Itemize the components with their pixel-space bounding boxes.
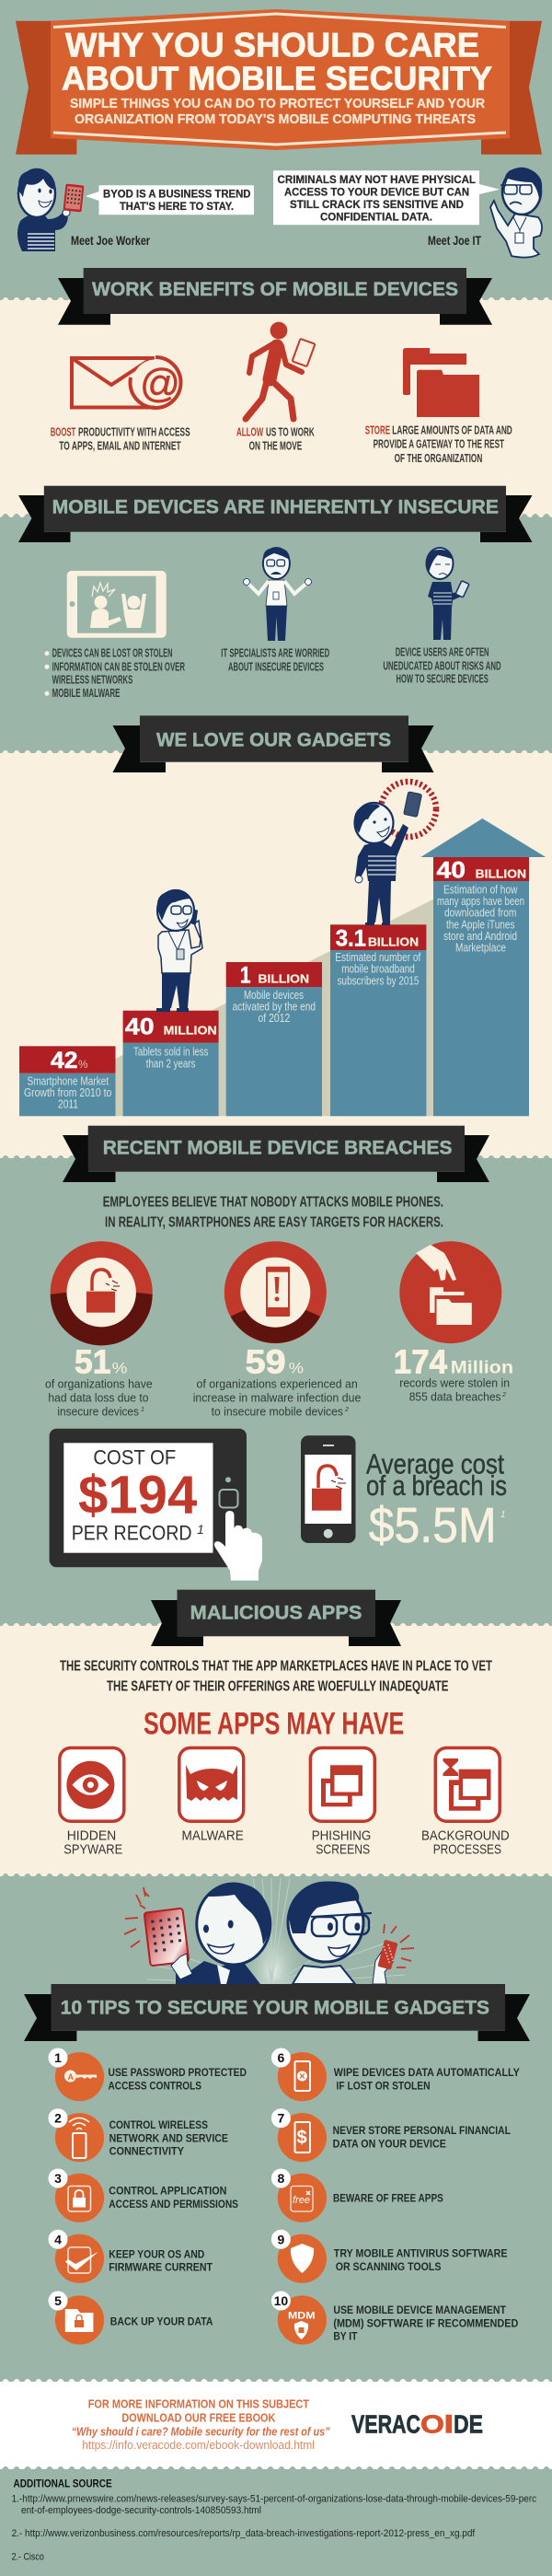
bar: 1 billion: activated by the end: [233, 1001, 316, 1014]
callout: average breach cost phone: Average cost: [366, 1448, 504, 1480]
icon: hand stealing folders: [399, 1241, 501, 1343]
footer call to action: https://info.veracode.com/ebook-download.html: [82, 2439, 315, 2452]
illustration: two characters with devices: [124, 1878, 414, 2025]
bar: 40 billion arrow: BILLION: [476, 867, 526, 880]
tip 10: (MDM) SOFTWARE IF RECOMMENDED: [333, 2316, 519, 2329]
bar: 40 billion arrow: [420, 818, 546, 1116]
tip 5: 5: [54, 2293, 62, 2308]
bar: 40 billion arrow: store and Android: [443, 930, 517, 943]
bar: 3.1 billion: Estimated number of: [335, 951, 421, 964]
ribbon title: MOBILE DEVICES ARE INHERENTLY INSECURE: [52, 496, 499, 517]
label: Meet Joe Worker: Meet Joe Worker: [71, 234, 151, 248]
sources: 2.- http://www.verizonbusiness.com/resources/reports/rp_data-breach-investigations-report-2012-press_en_xg.pdf: [12, 2528, 476, 2539]
tip 1: USE PASSWORD PROTECTED: [109, 2066, 247, 2079]
bar: 40 billion arrow: Estimation of how: [443, 884, 518, 897]
title: WHY YOU SHOULD CARE: [65, 27, 479, 64]
speech bubble: Joe IT: ACCESS TO YOUR DEVICE BUT CAN: [284, 185, 469, 198]
bar: 3.1 billion: BILLION: [368, 935, 419, 948]
callout: average breach cost phone: 1: [500, 1510, 506, 1520]
title banner: [16, 9, 542, 155]
tip 3: CONTROL APPLICATION: [109, 2185, 226, 2198]
chart: growing gadgets bar chart: [19, 818, 546, 1116]
callout: average breach cost phone: of a breach is: [366, 1469, 507, 1502]
stat: 174 million: records were stolen in: [399, 1376, 510, 1390]
bar: 40 million: Tablets sold in less: [133, 1046, 208, 1059]
ribbon: malicious apps: [151, 1590, 401, 1646]
icon: folders: [403, 348, 479, 417]
bar: 1 billion: BILLION: [258, 972, 309, 985]
ribbon: 10 tips: [24, 1984, 530, 2041]
bar: 3.1 billion: 3.1: [336, 925, 366, 951]
callout: average breach cost phone: [301, 1435, 507, 1553]
label: SPYWARE: [63, 1842, 122, 1858]
title: ABOUT MOBILE SECURITY: [62, 59, 492, 97]
character: worker raising phone: [354, 782, 436, 925]
tip 10: BY IT: [333, 2330, 358, 2343]
stat: 59 percent: 59: [246, 1343, 286, 1381]
speech bubble: Joe IT: STILL CRACK ITS SENSITIVE AND: [290, 198, 464, 211]
tip 8: free: [293, 2195, 310, 2206]
stat: 59 percent: increase in malware infection due: [193, 1391, 361, 1405]
text: boost: PRODUCTIVITY WITH ACCESS: [78, 425, 190, 438]
callout: cost per record tablet: COST OF: [93, 1446, 176, 1469]
tip 10: [271, 2291, 519, 2345]
bar: 42%: Growth from 2010 to: [24, 1086, 111, 1099]
tip 1: A: [68, 2072, 74, 2082]
stat: 174 million: 855 data breaches: [409, 1390, 501, 1404]
tip 4: KEEP YOUR OS AND: [109, 2247, 205, 2260]
app icon: phishing screens: [310, 1747, 374, 1821]
text: allow: US TO WORK: [266, 425, 315, 438]
stat: 51 percent: had data loss due to: [48, 1391, 149, 1405]
tip 8: [271, 2169, 443, 2222]
text: insecure bullets: DEVICES CAN BE LOST OR STOLEN: [52, 647, 172, 660]
text: device users: [383, 646, 501, 686]
tip 3: ACCESS AND PERMISSIONS: [109, 2198, 238, 2210]
text: boost: [51, 425, 190, 453]
app icon: malware: [179, 1747, 244, 1821]
bar: 1 billion: Mobile devices: [244, 989, 304, 1002]
tip 6: WIPE DEVICES DATA AUTOMATICALLY: [334, 2066, 520, 2079]
ribbon title: WORK BENEFITS OF MOBILE DEVICES: [92, 279, 458, 300]
bar: 1 billion: 1: [240, 962, 251, 988]
stat: 59 percent: %: [289, 1360, 304, 1377]
tip 4: FIRMWARE CURRENT: [109, 2261, 213, 2274]
label: Meet Joe IT: Meet Joe IT: [428, 234, 482, 248]
subtitle: ORGANIZATION FROM TODAY'S MOBILE COMPUTING THREATS: [75, 112, 476, 127]
tip 3: 3: [54, 2171, 62, 2186]
stat: 174 million: [394, 1343, 513, 1404]
ribbon title: MALICIOUS APPS: [190, 1603, 362, 1624]
label: HIDDEN: [67, 1828, 116, 1843]
text: boost: BOOST: [51, 425, 76, 438]
label: [312, 1828, 371, 1858]
character: Joe IT: [490, 168, 542, 258]
tip 1: ACCESS CONTROLS: [109, 2079, 201, 2092]
ribbon title: 10 TIPS TO SECURE YOUR MOBILE GADGETS: [61, 1998, 489, 2019]
tip 8: 8: [278, 2171, 285, 2186]
speech bubble: Joe Worker: BYOD IS A BUSINESS TREND: [103, 188, 251, 201]
stat: 51 percent: 1: [141, 1407, 144, 1413]
stat: 174 million: 2: [501, 1392, 506, 1398]
label: SCREENS: [316, 1842, 370, 1858]
stat: 174 million: Million: [451, 1359, 513, 1378]
stat: 51 percent: 51: [75, 1343, 110, 1381]
bar: 42%: 42: [51, 1048, 77, 1073]
callout: cost per record tablet: PER RECORD: [72, 1521, 192, 1544]
bar: 3.1 billion: mobile broadband: [341, 963, 415, 976]
tip 10: USE MOBILE DEVICE MANAGEMENT: [333, 2303, 507, 2316]
tip 1: [48, 2048, 247, 2101]
bar: 3.1 billion: [330, 924, 426, 1116]
stat: 59 percent: 2: [344, 1407, 349, 1413]
tip 10: MDM: [288, 2310, 315, 2321]
label: BACKGROUND: [421, 1828, 510, 1843]
text: store: STORE: [365, 424, 390, 436]
bar: 40 billion arrow: Marketplace: [455, 942, 506, 955]
subtitle: [70, 97, 486, 127]
tip 7: [271, 2108, 511, 2162]
tip 7: NEVER STORE PERSONAL FINANCIAL: [333, 2124, 511, 2137]
ribbon: inherently insecure: [18, 486, 532, 542]
stat: 59 percent: [193, 1343, 361, 1419]
speech bubble: Joe IT: CRIMINALS MAY NOT HAVE PHYSICAL: [278, 173, 476, 186]
text: allow: ALLOW: [236, 425, 263, 438]
tip 2: NETWORK AND SERVICE: [109, 2131, 228, 2144]
stat: 51 percent: [45, 1343, 153, 1419]
label: [421, 1828, 510, 1858]
tip 2: CONNECTIVITY: [109, 2145, 184, 2158]
speech bubble: Joe IT: [273, 170, 500, 225]
tip 6: IF LOST OR STOLEN: [337, 2080, 431, 2093]
text: IT specialists: ABOUT INSECURE DEVICES: [228, 660, 324, 673]
ribbon: work benefits: [58, 268, 492, 325]
app icon: hidden spyware: [60, 1747, 124, 1821]
speech bubble: Joe Worker: [86, 185, 254, 215]
text: device users: HOW TO SECURE DEVICES: [396, 673, 489, 686]
tip 2: CONTROL WIRELESS: [109, 2118, 208, 2131]
tip 4: 4: [54, 2232, 62, 2246]
bar: 40 billion arrow: the Apple iTunes: [446, 918, 515, 931]
title: [62, 27, 492, 97]
text: boost: TO APPS, EMAIL AND INTERNET: [59, 440, 181, 453]
heading: some apps may have: SOME APPS MAY HAVE: [144, 1706, 404, 1741]
bar: 40 million: than 2 years: [146, 1057, 195, 1070]
footer call to action: FOR MORE INFORMATION ON THIS SUBJECT: [88, 2398, 309, 2411]
icon: email: @: [140, 361, 180, 406]
sources: ent-of-employees-dodge-security-controls-140850593.html: [21, 2505, 261, 2516]
text: store: OF THE ORGANIZATION: [395, 452, 482, 465]
tip 6: [271, 2048, 520, 2101]
logo: Veracode: DE: [454, 2410, 483, 2439]
label: [63, 1828, 122, 1858]
bar: 1 billion: [226, 962, 322, 1116]
bar: 40 million: [123, 1011, 219, 1116]
app icon: background processes: [435, 1747, 500, 1821]
bar: 40 billion arrow: 40: [436, 857, 466, 883]
bar: 1 billion: of 2012: [258, 1012, 290, 1025]
tip 5: BACK UP YOUR DATA: [110, 2315, 213, 2328]
bar: 42%: 2011: [58, 1097, 78, 1110]
label: MALWARE: [182, 1828, 244, 1843]
intro text: breaches: [103, 1195, 443, 1230]
ribbon title: RECENT MOBILE DEVICE BREACHES: [103, 1137, 452, 1158]
speech bubble: Joe Worker: THAT'S HERE TO STAY.: [120, 200, 234, 213]
tip 7: $: [296, 2128, 307, 2148]
text: device users: DEVICE USERS ARE OFTEN: [396, 646, 489, 659]
text: allow: ON THE MOVE: [249, 440, 302, 453]
stat: 174 million: 174: [394, 1343, 447, 1381]
character: IT man on phone: [156, 890, 202, 1012]
icon: email: [72, 357, 180, 408]
logo: Veracode: [351, 2410, 483, 2439]
icon: 59 percent phone gauge: [224, 1241, 327, 1343]
sources: [12, 2477, 537, 2562]
bar: 42%: Smartphone Market: [28, 1075, 109, 1088]
icon: 51 percent lock gauge: [51, 1241, 153, 1346]
tip 9: OR SCANNING TOOLS: [336, 2260, 442, 2273]
footer call to action: [72, 2398, 330, 2452]
tip 9: [271, 2230, 508, 2283]
callout: cost per record tablet: [50, 1429, 262, 1581]
tip 5: [48, 2291, 213, 2345]
bar: 40 billion arrow: many apps have been: [437, 895, 524, 908]
stat: 59 percent: of organizations experienced an: [197, 1376, 358, 1390]
character: worried IT specialist: [243, 548, 311, 641]
tip 2: 2: [54, 2111, 62, 2126]
tip 3: [48, 2169, 238, 2222]
ribbon title: WE LOVE OUR GADGETS: [156, 730, 391, 751]
text: IT specialists: [221, 647, 329, 673]
callout: cost per record tablet: $194: [78, 1465, 197, 1525]
bar: 40 billion arrow: downloaded from: [444, 907, 516, 920]
tip 7: DATA ON YOUR DEVICE: [333, 2137, 446, 2150]
text: insecure bullets: WIRELESS NETWORKS: [52, 674, 132, 687]
character: Joe Worker: [17, 169, 84, 251]
tip 6: 6: [278, 2050, 285, 2065]
character: device user: [427, 548, 469, 640]
tip 4: [48, 2230, 213, 2283]
ribbon: recent breaches: [63, 1126, 489, 1182]
tip 1: 1: [54, 2050, 62, 2065]
label: PROCESSES: [433, 1842, 501, 1858]
bar: 40 million: MILLION: [164, 1025, 217, 1038]
bar: 42%: [19, 1046, 116, 1116]
bar: 40 million: 40: [125, 1015, 155, 1040]
sources: 2.- Cisco: [12, 2551, 44, 2562]
tip 9: 9: [278, 2232, 285, 2246]
bar: 42%: %: [78, 1058, 88, 1071]
callout: cost per record tablet: 1: [197, 1522, 204, 1537]
tip 9: TRY MOBILE ANTIVIRUS SOFTWARE: [334, 2247, 508, 2260]
tip 7: 7: [278, 2111, 285, 2126]
label: PHISHING: [312, 1828, 371, 1843]
ribbon: we love our gadgets: [112, 715, 434, 772]
speech bubble: Joe IT: CONFIDENTIAL DATA.: [320, 210, 432, 223]
logo: Veracode: O: [420, 2410, 444, 2439]
icon: tablet theft scene: [67, 571, 167, 638]
icon: pointing hand: [214, 1511, 262, 1581]
logo: Veracode: VERAC: [351, 2410, 420, 2439]
stat: 59 percent: to insecure mobile devices: [212, 1405, 343, 1419]
intro text: malicious apps: [60, 1659, 492, 1695]
stat: 51 percent: insecure devices: [57, 1405, 139, 1419]
stat: 51 percent: of organizations have: [45, 1376, 153, 1390]
tip 10: 10: [274, 2293, 288, 2308]
subtitle: SIMPLE THINGS YOU CAN DO TO PROTECT YOURSELF AND YOUR: [70, 97, 486, 111]
sources: ADDITIONAL SOURCE: [13, 2477, 112, 2490]
callout: average breach cost phone: $5.5M: [369, 1498, 497, 1553]
text: insecure bullets: INFORMATION CAN BE STOLEN OVER: [52, 660, 185, 673]
tip 2: [48, 2108, 228, 2162]
text: insecure bullets: [44, 647, 185, 700]
bar: 3.1 billion: subscribers by 2015: [338, 974, 419, 987]
text: allow: [236, 425, 315, 453]
stat: 51 percent: %: [112, 1360, 127, 1377]
footer call to action: “Why should i care? Mobile security for the rest of us”: [72, 2425, 330, 2438]
tip 8: BEWARE OF FREE APPS: [333, 2192, 443, 2205]
footer call to action: DOWNLOAD OUR FREE EBOOK: [121, 2412, 275, 2425]
icon: walking person with phone: [246, 322, 315, 419]
text: store: [365, 424, 512, 465]
text: IT specialists: IT SPECIALISTS ARE WORRIED: [221, 647, 329, 660]
text: insecure bullets: MOBILE MALWARE: [52, 687, 120, 700]
